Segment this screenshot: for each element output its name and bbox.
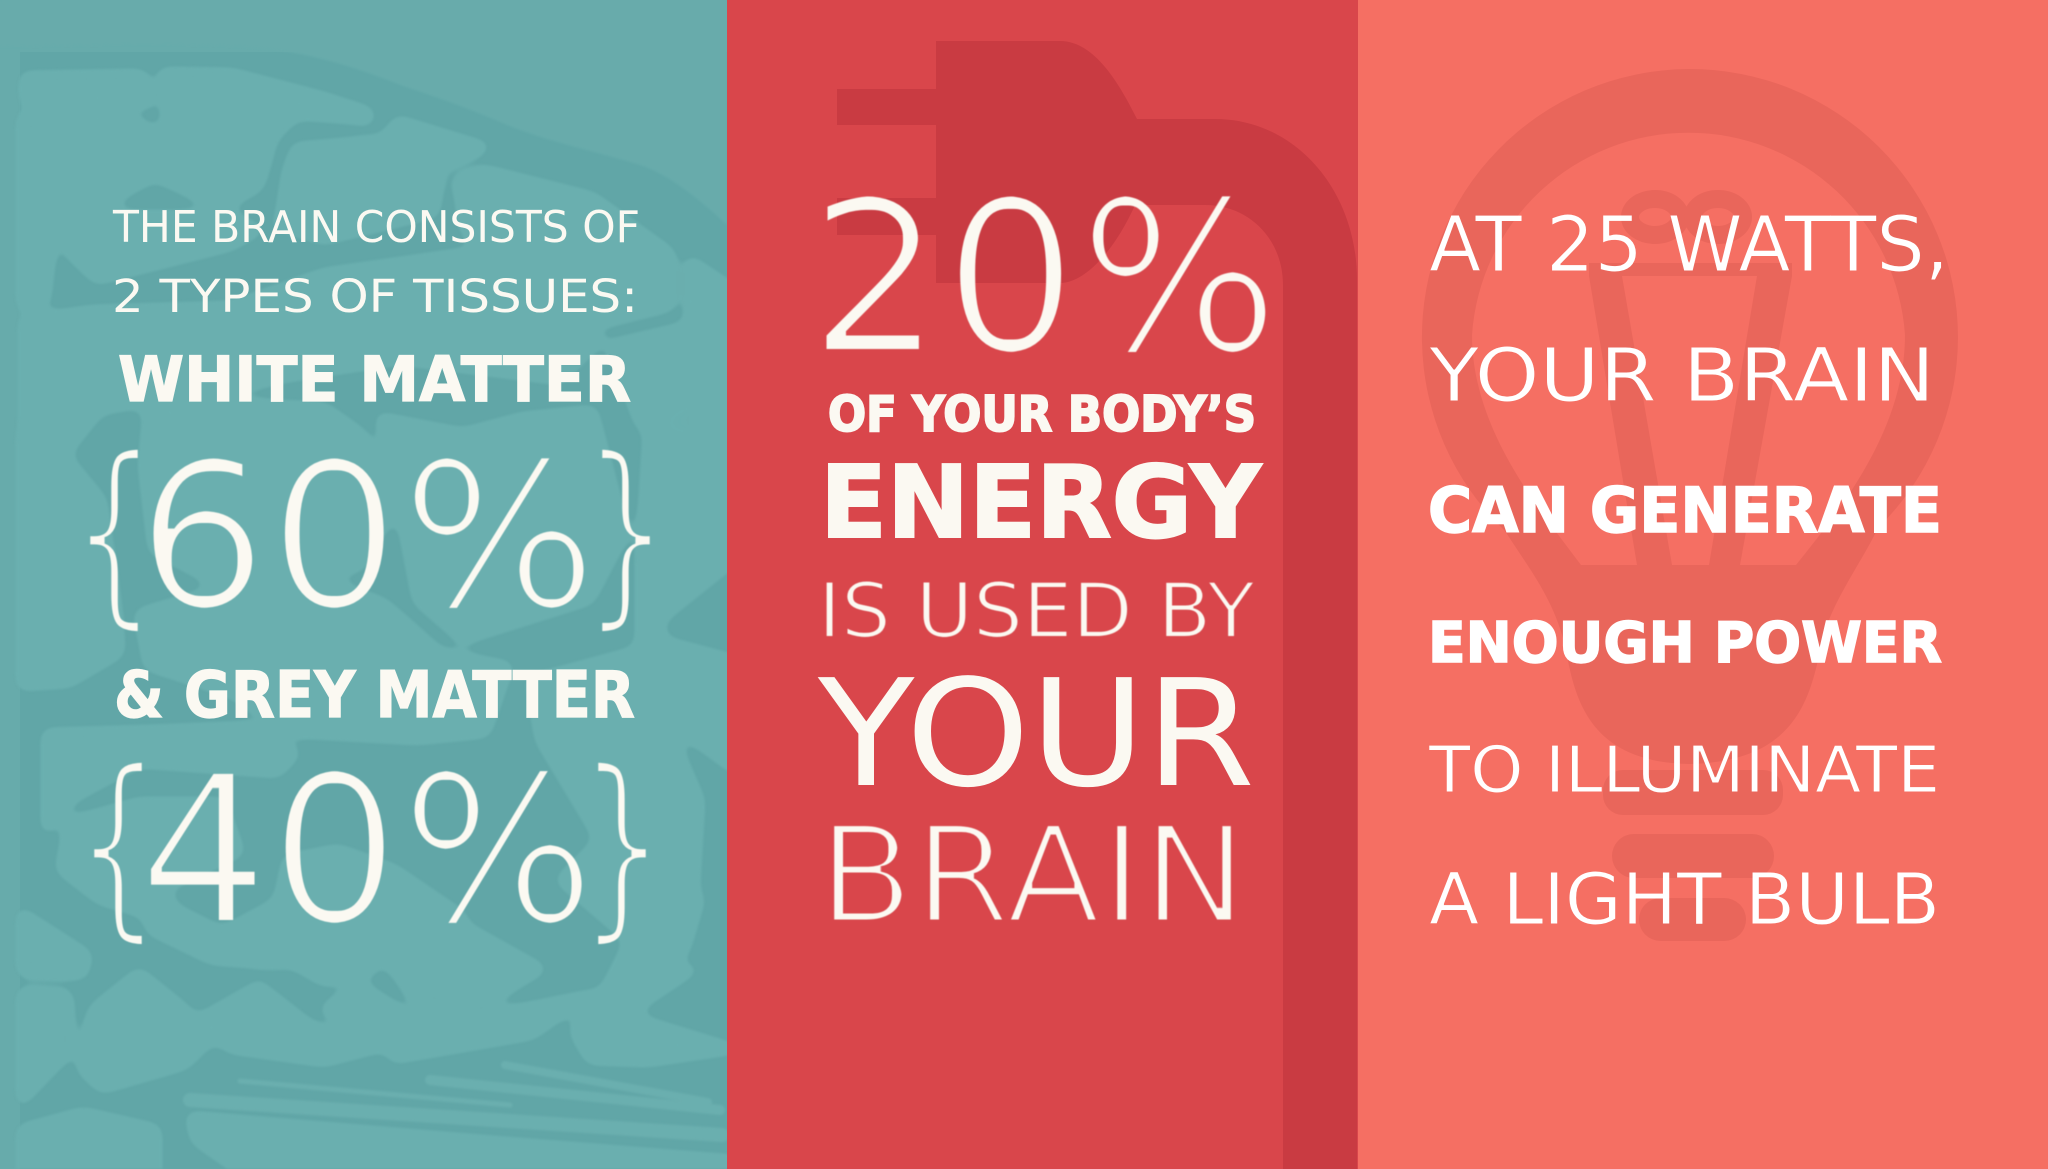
- stat: braces around 60 percent: {: [70, 413, 158, 649]
- panel: energy use: [727, 0, 1358, 1169]
- icon: light bulb: [1422, 69, 1958, 941]
- heading: grey matter: & GREY MATTER: [114, 658, 635, 733]
- text: enough power: ENOUGH POWER: [1428, 611, 1942, 676]
- stat value: 60%: 60%: [136, 419, 598, 655]
- stat: braces around 60 percent: [70, 413, 670, 649]
- text: of your body's: OF YOUR BODY’S: [828, 385, 1256, 443]
- text: your: YOUR: [817, 648, 1255, 820]
- text: a light bulb: A LIGHT BULB: [1429, 858, 1940, 941]
- text: can generate: CAN GENERATE: [1428, 474, 1942, 547]
- panel: brain tissues: [0, 0, 735, 1169]
- stat: braces around 40 percent: [74, 726, 666, 962]
- intro text: THE BRAIN CONSISTS OF: [112, 202, 640, 253]
- icon: electric plug: [837, 41, 1357, 1169]
- intro text: 2 TYPES OF TISSUES:: [112, 270, 638, 323]
- icon: brain background: [0, 0, 735, 1169]
- text: at 25 watts: AT 25 WATTS,: [1429, 201, 1949, 290]
- stat: braces around 60 percent: }: [582, 413, 670, 649]
- text: energy: ENERGY: [820, 444, 1263, 561]
- stat value: 20%: 20%: [808, 155, 1280, 401]
- stat value: 40%: 40%: [138, 731, 596, 971]
- stat: braces around 40 percent: }: [578, 726, 666, 962]
- panel: watts: [1358, 0, 2048, 1169]
- text: to illuminate: TO ILLUMINATE: [1428, 733, 1940, 808]
- text: is used by: IS USED BY: [818, 566, 1256, 655]
- intro text: [112, 202, 640, 323]
- stat: braces around 40 percent: {: [74, 726, 162, 962]
- text: your brain: YOUR BRAIN: [1428, 333, 1935, 419]
- heading: white matter: WHITE MATTER: [118, 343, 631, 416]
- text: brain: BRAIN: [818, 797, 1247, 954]
